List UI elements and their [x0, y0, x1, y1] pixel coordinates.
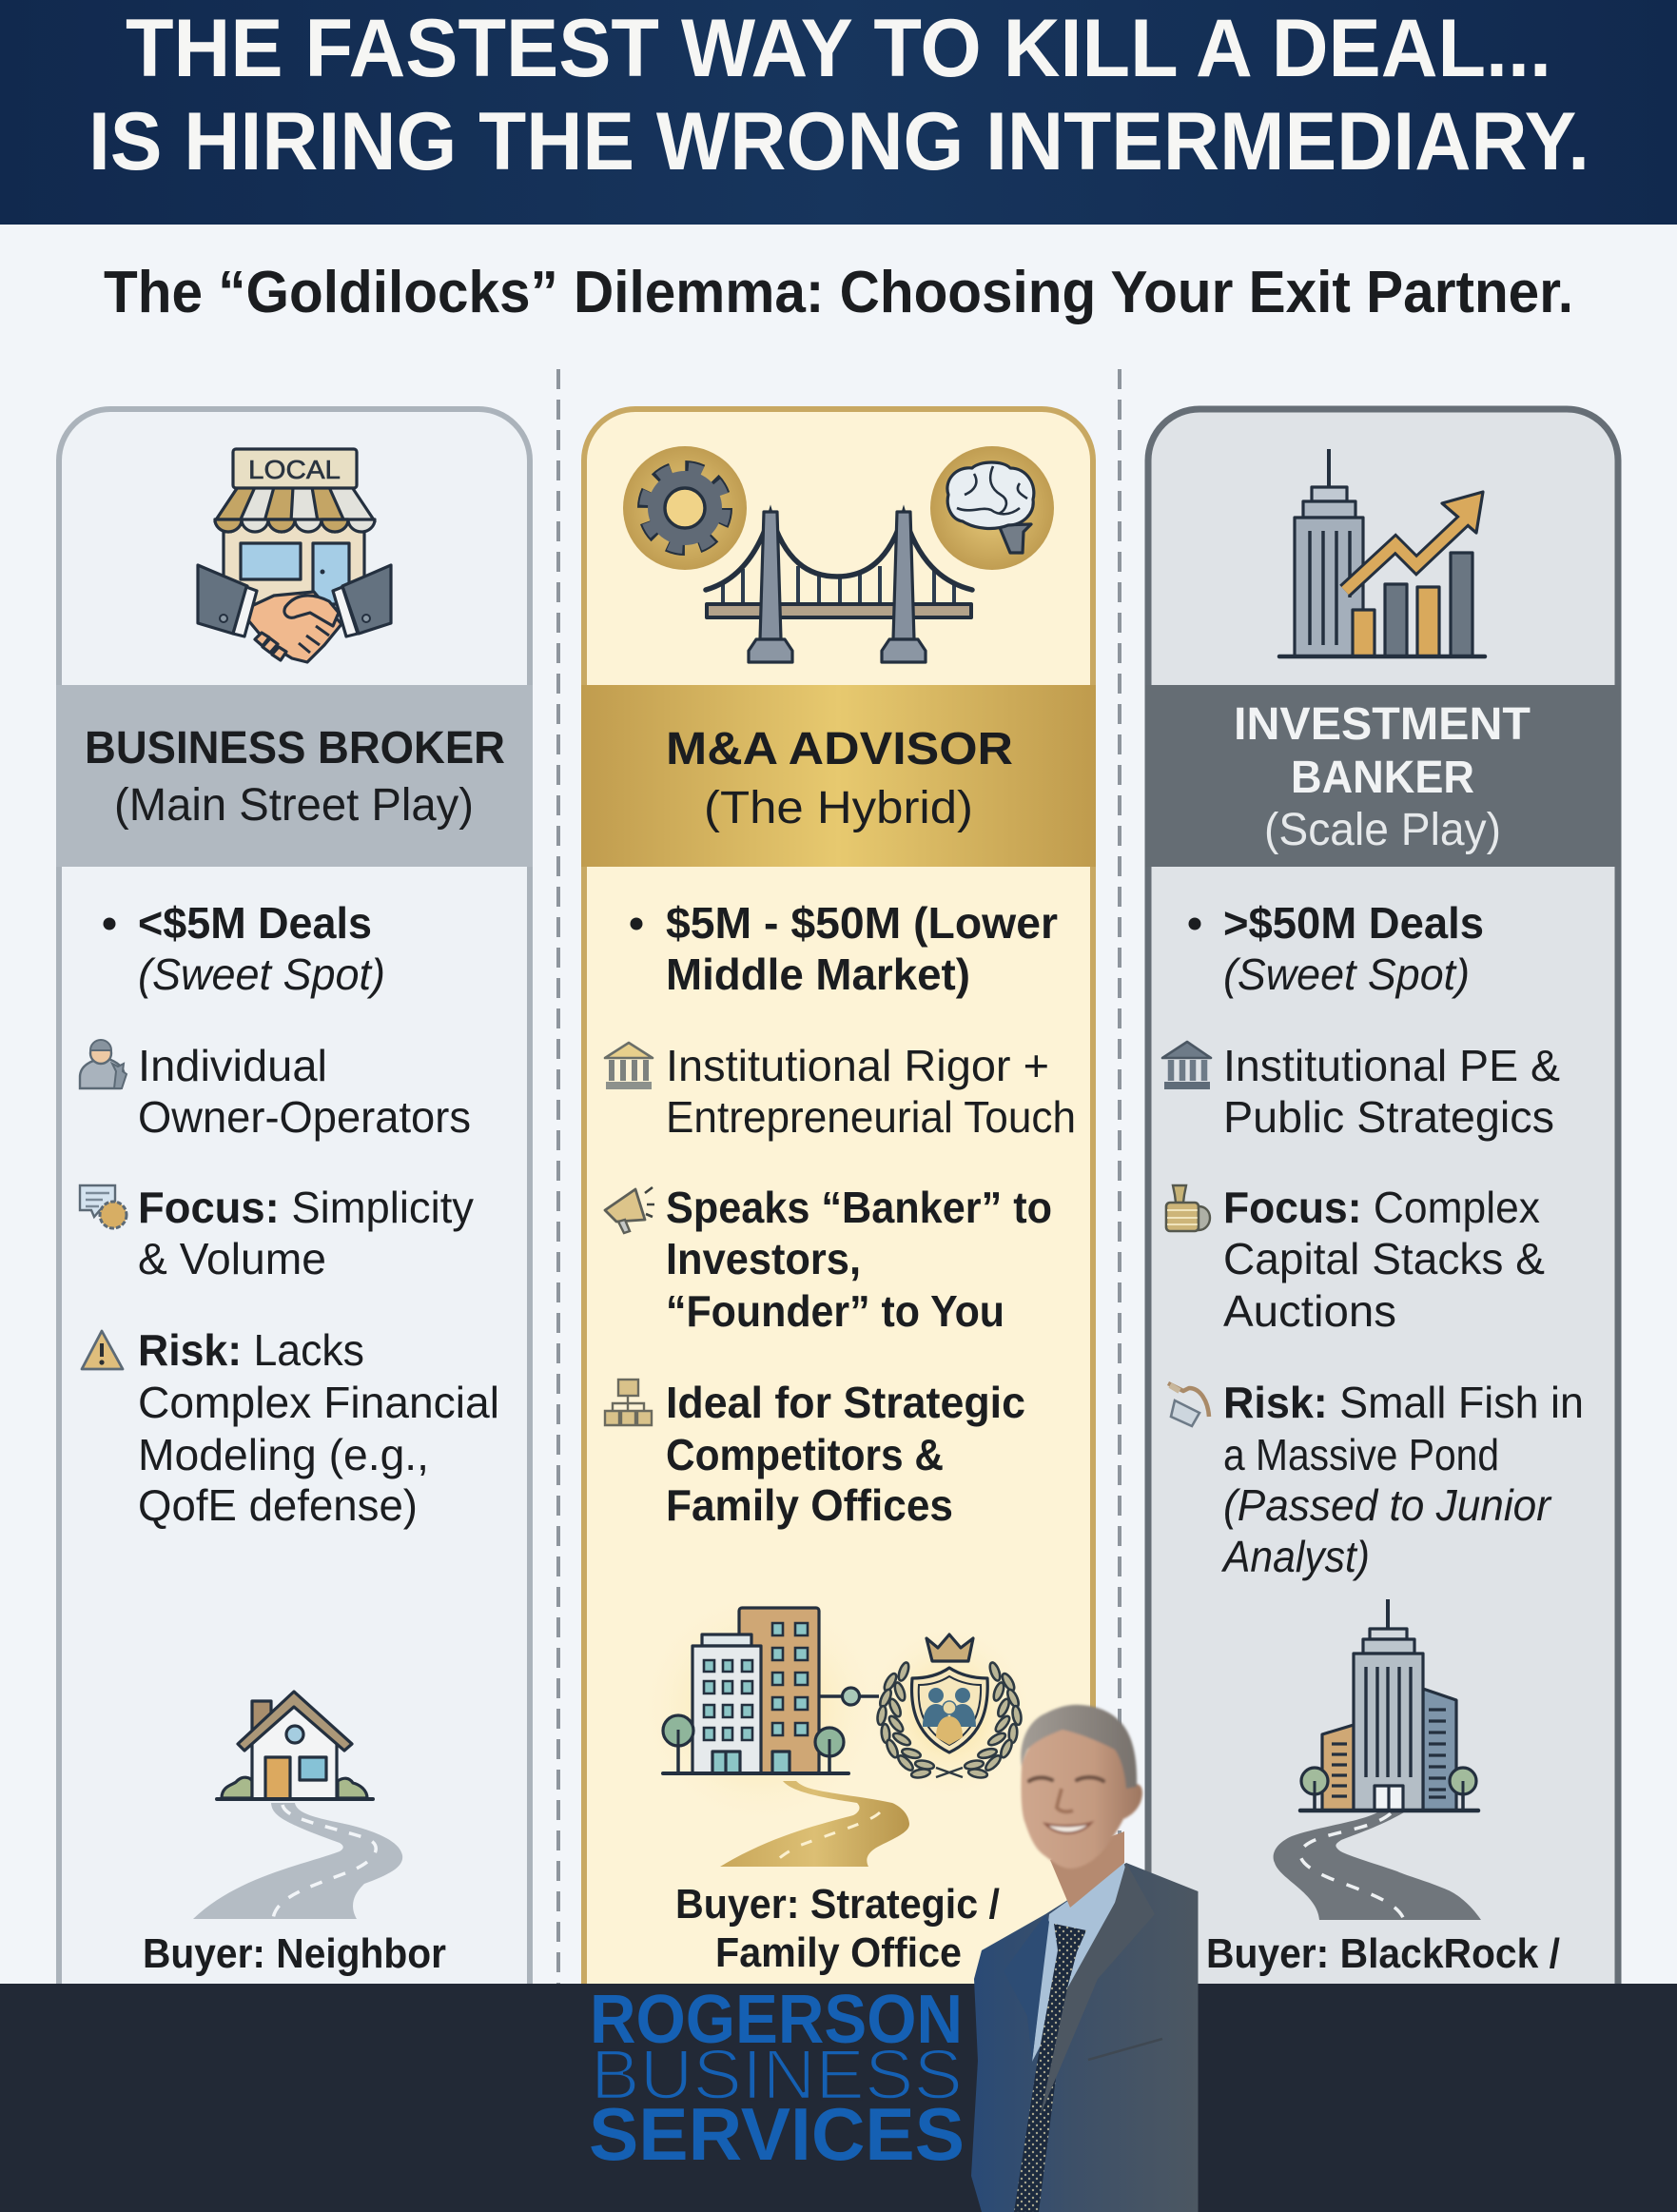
header band: m&a advisor: (The Hybrid) — [704, 783, 973, 833]
text: buyer blackrock: Buyer: BlackRock / — [1206, 1930, 1560, 1977]
dashed column divider left — [556, 369, 560, 1984]
text: risk: Analyst) — [1220, 1532, 1370, 1581]
text: focus — [1223, 1183, 1545, 1336]
text: institutional pe: Public Strategics — [1223, 1092, 1554, 1142]
text: focus: Capital Stacks & — [1223, 1234, 1545, 1283]
text: buyer strategic family office: Family Office — [715, 1929, 962, 1976]
icon: gear in gold circle — [623, 446, 747, 570]
icon: org chart — [605, 1380, 652, 1425]
text: speaks banker: “Founder” to You — [666, 1286, 1004, 1336]
header band: business broker: BUSINESS BROKER — [85, 723, 505, 773]
icon: local shop with handshake — [198, 449, 391, 662]
text: focus: Focus: Simplicity — [138, 1183, 474, 1232]
text: risk: QofE defense) — [138, 1480, 418, 1530]
text: focus: & Volume — [138, 1234, 326, 1283]
bullet: deal size: (Sweet Spot) — [1223, 949, 1470, 999]
bullet: deal size — [1189, 898, 1484, 999]
subtitle: The “Goldilocks” Dilemma: Choosing Your Exit Partner. — [104, 260, 1573, 325]
icon: corporate buildings and family office crest — [637, 1589, 1035, 1867]
text: risk: (Passed to Junior — [1223, 1480, 1552, 1530]
text: risk: a Massive Pond — [1223, 1430, 1499, 1479]
text: risk: Risk: Small Fish in — [1223, 1378, 1584, 1427]
text: risk: Modeling (e.g., — [138, 1430, 429, 1479]
text: ideal for strategic — [666, 1378, 1025, 1530]
text: risk — [1220, 1378, 1584, 1581]
text: ideal for strategic: Family Offices — [666, 1480, 953, 1530]
bullet: deal size: $5M - $50M (Lower — [666, 898, 1058, 948]
text: institutional rigor — [666, 1041, 1076, 1142]
text: buyer strategic family office: Buyer: Strategic / — [675, 1881, 1000, 1928]
icon: hook and fish — [1168, 1383, 1209, 1426]
header band: m&a advisor: M&A ADVISOR — [666, 724, 1013, 774]
bullet: deal size: <$5M Deals — [138, 898, 372, 948]
icon: house with road — [193, 1692, 402, 1919]
bullet: deal size — [630, 898, 1058, 999]
logo: rogerson business services: ROGERSON — [590, 1982, 963, 2058]
icon: message with coin — [80, 1185, 127, 1228]
icon: skyscraper with growth chart — [1279, 449, 1485, 656]
footer bar — [0, 1984, 1677, 2212]
icon: megaphone — [605, 1187, 654, 1233]
header band: business broker — [56, 685, 533, 867]
text: buyer neighbor: Buyer: Neighbor — [143, 1930, 446, 1977]
panel: investment banker — [1145, 409, 1621, 1998]
logo: rogerson business services: SERVICES — [589, 2092, 965, 2176]
text: risk — [138, 1325, 499, 1530]
logo: rogerson business services — [589, 1982, 965, 2176]
logo: rogerson business services: BUSINESS — [591, 2035, 963, 2114]
icon: capital stack — [1166, 1185, 1210, 1231]
text: ideal for strategic: Ideal for Strategic — [666, 1378, 1025, 1427]
text: institutional rigor: Institutional Rigor + — [666, 1041, 1049, 1090]
text: speaks banker: Investors, — [666, 1234, 861, 1283]
text: focus: Focus: Complex — [1223, 1183, 1540, 1232]
icon: local shop with handshake: LOCAL — [248, 455, 341, 484]
icon: brain in gold circle — [930, 446, 1054, 570]
header band: investment banker: INVESTMENT — [1234, 699, 1531, 750]
text: individual owner-operators: Owner-Operators — [138, 1092, 471, 1142]
text: speaks banker — [666, 1183, 1052, 1336]
icon: institution — [1162, 1042, 1211, 1089]
bullet: deal size: (Sweet Spot) — [138, 949, 385, 999]
header band: m&a advisor — [581, 685, 1096, 867]
title banner: THE FASTEST WAY TO KILL A DEAL... — [126, 3, 1551, 94]
panel: business broker — [56, 409, 533, 1998]
header band: investment banker: (Scale Play) — [1264, 805, 1501, 855]
text: ideal for strategic: Competitors & — [666, 1430, 944, 1479]
text: institutional pe: Institutional PE & — [1223, 1041, 1560, 1090]
photo: smiling man in suit — [971, 1705, 1199, 2212]
icon: warning — [82, 1331, 123, 1369]
text: risk: Risk: Lacks — [138, 1325, 364, 1375]
icon: suspension bridge — [706, 512, 972, 662]
header band: business broker: (Main Street Play) — [114, 780, 474, 831]
title banner: IS HIRING THE WRONG INTERMEDIARY. — [88, 96, 1589, 187]
text: speaks banker: Speaks “Banker” to — [666, 1183, 1052, 1232]
text: focus: Auctions — [1223, 1286, 1396, 1336]
text: institutional pe — [1223, 1041, 1560, 1142]
icon: owner operator — [80, 1040, 127, 1088]
header band: investment banker: BANKER — [1291, 753, 1474, 803]
panel: m&a advisor — [581, 409, 1096, 1998]
bullet: deal size — [103, 898, 385, 999]
text: risk: Complex Financial — [138, 1378, 499, 1427]
icon: corporate tower with road — [1274, 1599, 1481, 1920]
text: focus — [138, 1183, 474, 1283]
title banner — [0, 0, 1677, 225]
text: buyer strategic family office — [675, 1881, 1000, 1976]
bullet: deal size: Middle Market) — [666, 949, 970, 999]
header band: investment banker — [1145, 685, 1621, 867]
bullet: deal size: >$50M Deals — [1223, 898, 1484, 948]
dashed column divider right — [1118, 369, 1121, 1984]
icon: institution — [605, 1043, 653, 1089]
text: individual owner-operators: Individual — [138, 1041, 327, 1090]
text: institutional rigor: Entrepreneurial Touch — [666, 1092, 1076, 1142]
text: individual owner-operators — [138, 1041, 471, 1142]
